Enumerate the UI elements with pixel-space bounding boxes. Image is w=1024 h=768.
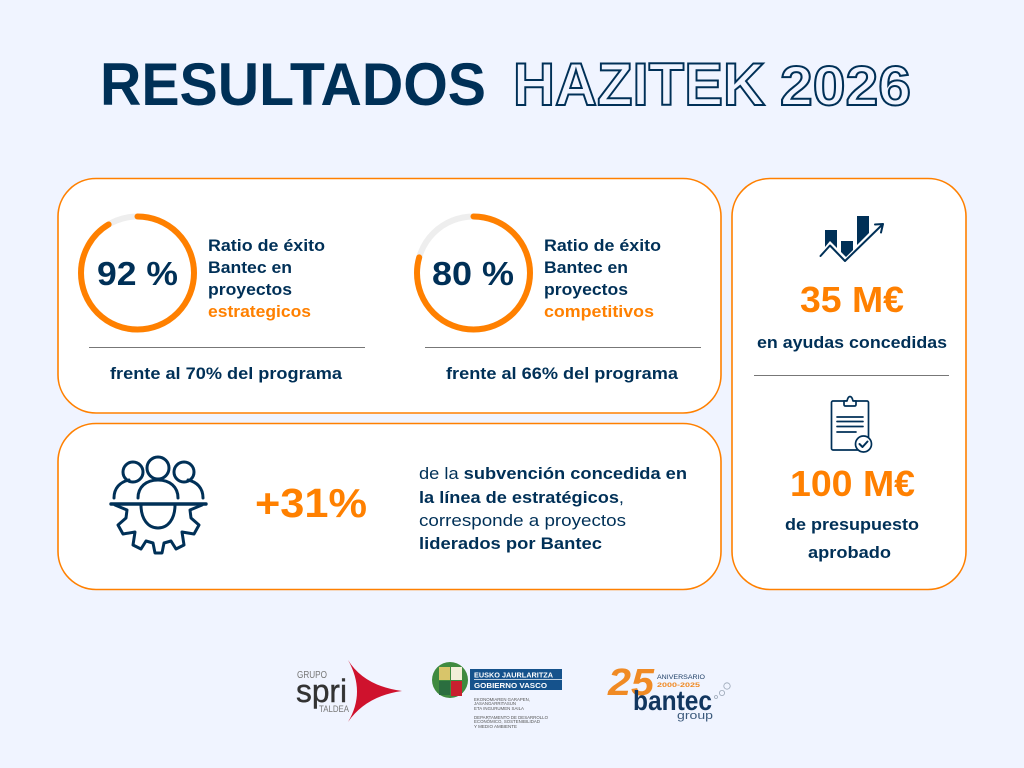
logo: Bantec 25 anniversary: 25	[607, 662, 655, 704]
text: competitive ratio: Ratio de éxito	[544, 236, 661, 255]
text: awarded aid: en ayudas concedidas	[757, 333, 947, 352]
text: strategic comparison: frente al 70% del programa	[110, 364, 343, 383]
stat: 35 million euros: 35 M€	[800, 279, 904, 320]
panel: subsidy share	[58, 424, 721, 590]
logo: Basque Government	[432, 662, 562, 729]
logo: Bantec 25 anniversary: group	[677, 710, 713, 722]
donut chart: 80 percent: 80 %	[432, 255, 514, 292]
logo: Basque Government: DEPARTAMENTO DE DESARROLLO	[474, 715, 548, 720]
logo: SPRI: GRUPO	[297, 670, 327, 681]
text: competitive ratio: proyectos	[544, 280, 628, 299]
text: approved budget: aprobado	[808, 543, 891, 562]
icon: clipboard with check	[832, 396, 872, 452]
text: subsidy description: la línea de estratégicos ,	[419, 488, 624, 507]
title: 2026	[780, 54, 911, 117]
panel: success ratios	[58, 178, 721, 413]
donut chart: 92 percent: 92 %	[97, 255, 178, 292]
text: strategic ratio	[208, 236, 325, 321]
donut chart: 80 percent	[417, 216, 530, 330]
title: RESULTADOS	[100, 51, 486, 118]
icon: rising chart	[820, 216, 883, 261]
icon: team and gear	[111, 457, 206, 553]
text: competitive ratio	[544, 236, 661, 321]
text: approved budget: de presupuesto	[785, 515, 919, 534]
logo: Basque Government: ECONÓMICO, SOSTENIBILIDAD	[474, 718, 541, 724]
text: strategic ratio: estrategicos	[208, 302, 311, 321]
text: subsidy description: de la subvención concedida en	[419, 464, 687, 483]
logo: SPRI	[296, 660, 402, 722]
logo: Basque Government: Y MEDIO AMBIENTE	[474, 724, 517, 729]
text: strategic ratio: proyectos	[208, 280, 292, 299]
text: approved budget	[785, 515, 919, 562]
stat: 100 million euros: 100 M€	[790, 463, 915, 504]
text: competitive comparison: frente al 66% del programa	[446, 364, 679, 383]
logo: Basque Government: ETA INGURUMEN SAILA	[474, 706, 524, 711]
text: competitive ratio: competitivos	[544, 302, 654, 321]
logo: SPRI: TALDEA	[319, 704, 350, 715]
text: strategic ratio: Bantec en	[208, 258, 292, 277]
donut chart: 92 percent	[81, 216, 194, 330]
logo: Bantec 25 anniversary: bantec	[633, 685, 712, 716]
title: HAZITEK	[513, 51, 765, 118]
text: subsidy description	[419, 464, 687, 553]
logo: Bantec 25 anniversary: ANIVERSARIO	[657, 674, 705, 681]
stat: plus 31 percent: +31%	[255, 480, 367, 526]
logo: Basque Government: JASANGARRITASUN	[474, 701, 516, 706]
title	[100, 51, 911, 118]
logo: Bantec 25 anniversary: 2000-2025	[657, 682, 701, 689]
text: subsidy description: liderados por Bantec	[419, 534, 602, 553]
text: strategic ratio: Ratio de éxito	[208, 236, 325, 255]
text: competitive ratio: Bantec en	[544, 258, 628, 277]
logo: Basque Government: GOBIERNO VASCO	[474, 683, 548, 690]
logo: Basque Government: EUSKO JAURLARITZA	[474, 672, 553, 680]
logo: Basque Government: EKONOMIAREN GARAPEN,	[474, 697, 530, 702]
logo: Bantec 25 anniversary	[607, 662, 730, 722]
panel: funding totals	[732, 178, 966, 590]
text: subsidy description: corresponde a proyectos	[419, 511, 626, 530]
logo: SPRI: spri	[296, 673, 347, 709]
